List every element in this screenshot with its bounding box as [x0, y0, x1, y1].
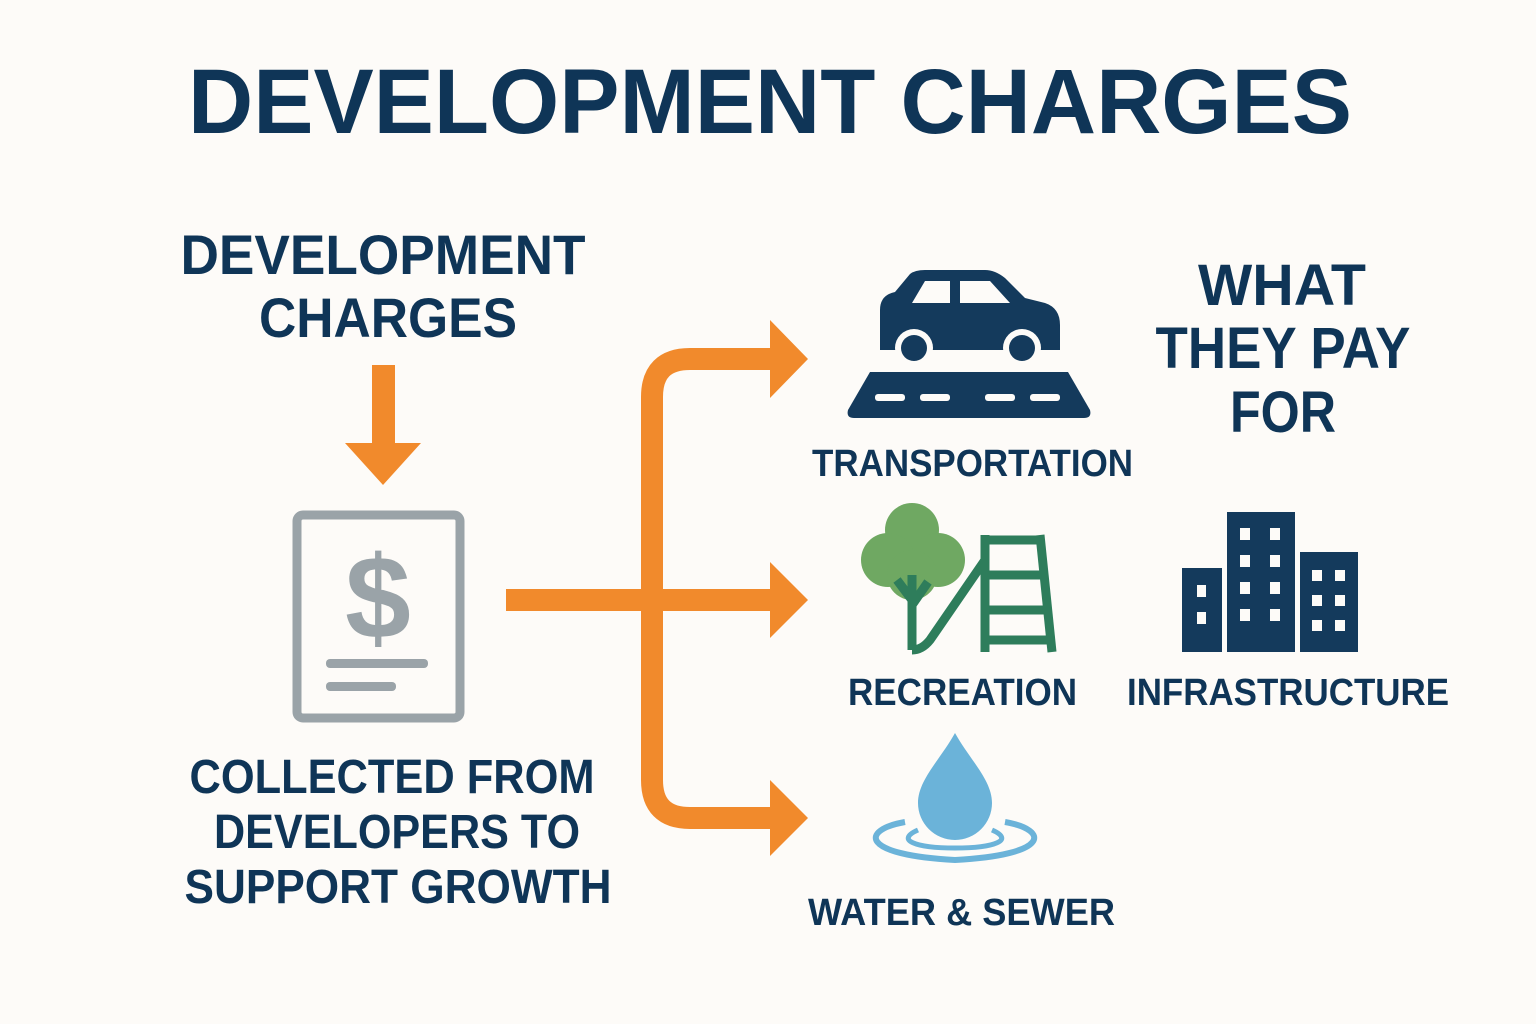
- text: collected from developers: DEVELOPERS TO: [214, 806, 580, 859]
- heading: what they pay for: [1156, 253, 1410, 445]
- title: DEVELOPMENT CHARGES: [188, 51, 1352, 153]
- icon: invoice document: $: [345, 532, 411, 664]
- label: water & sewer: WATER & SEWER: [808, 892, 1115, 934]
- icon: invoice document: [297, 515, 460, 718]
- text: collected from developers: SUPPORT GROWTH: [184, 861, 612, 914]
- text: collected from developers: COLLECTED FROM: [190, 751, 594, 804]
- label: transportation: TRANSPORTATION: [812, 443, 1133, 485]
- text: collected from developers: [184, 751, 612, 914]
- subtitle: development charges: [180, 223, 586, 349]
- icon: tree and slide: [861, 503, 1052, 652]
- heading: what they pay for: FOR: [1230, 380, 1336, 445]
- arrow: down: [345, 365, 421, 485]
- icon: water drop: [876, 733, 1034, 860]
- icon: buildings: [1182, 512, 1358, 652]
- label: recreation: RECREATION: [848, 672, 1077, 714]
- heading: what they pay for: THEY PAY: [1156, 316, 1410, 381]
- heading: what they pay for: WHAT: [1198, 253, 1366, 318]
- subtitle: development charges: CHARGES: [259, 286, 517, 349]
- icon: car on road: [848, 270, 1090, 418]
- label: infrastructure: INFRASTRUCTURE: [1127, 672, 1449, 714]
- arrows: branching flow: [506, 320, 808, 856]
- subtitle: development charges: DEVELOPMENT: [180, 223, 586, 286]
